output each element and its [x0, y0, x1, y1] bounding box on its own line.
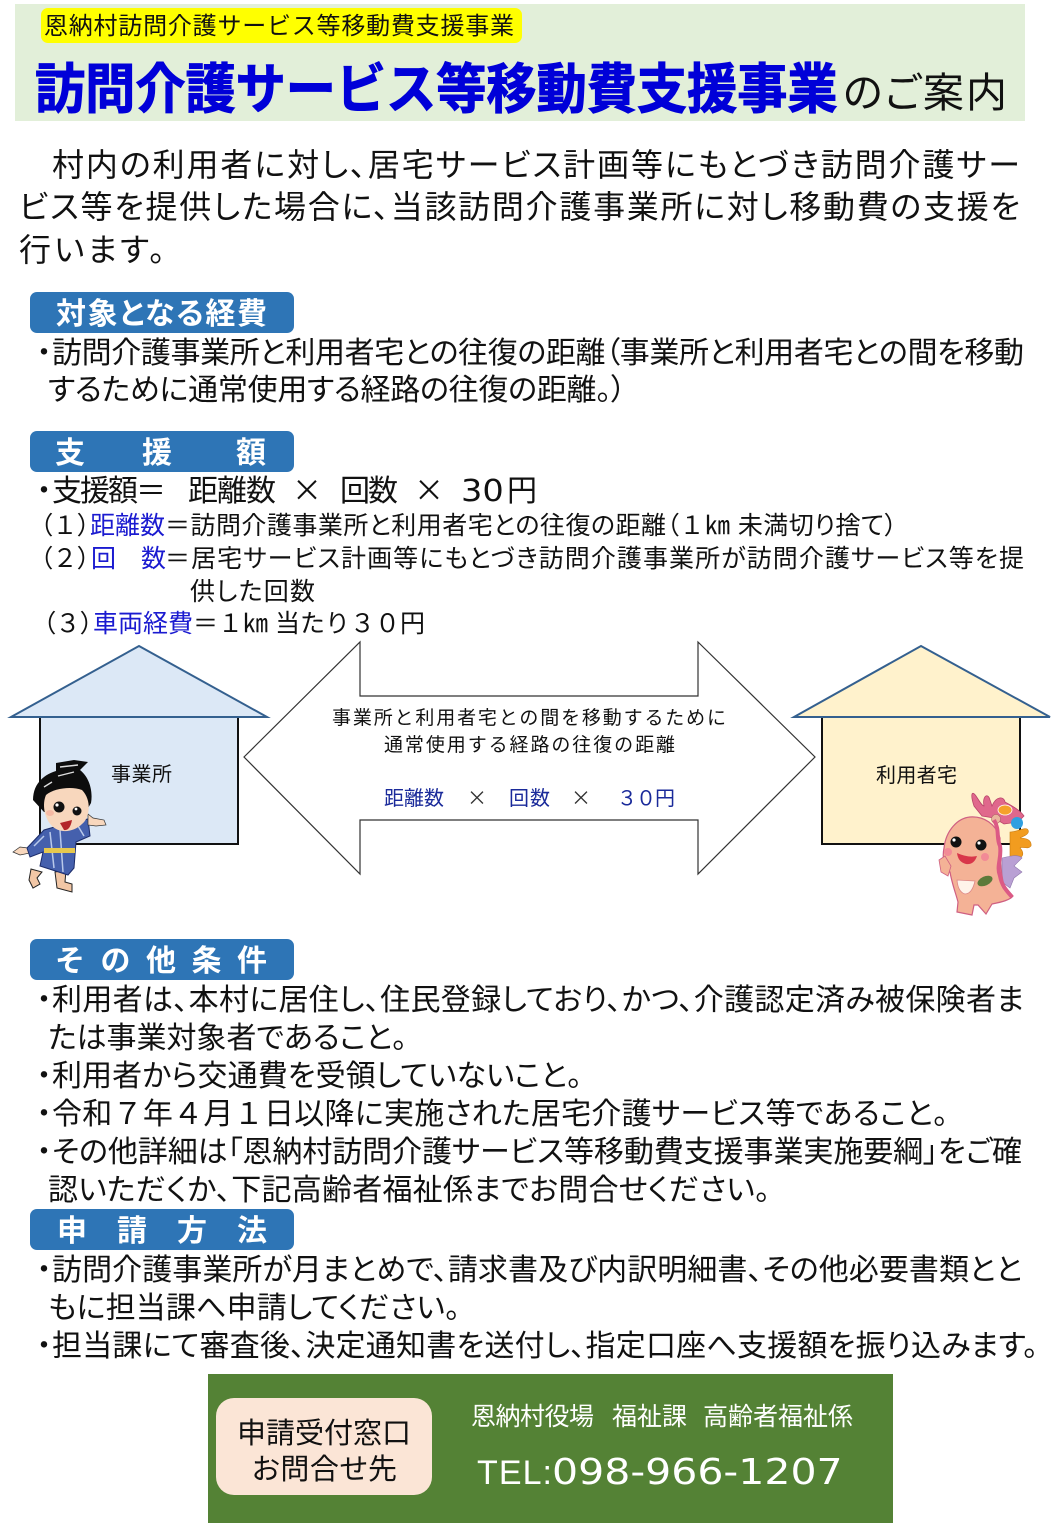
department name: 高齢者福祉係	[703, 1403, 853, 1431]
text: application method	[29, 1254, 1038, 1363]
text: application method: もに担当課へ申請してください。	[48, 1292, 460, 1325]
phone number: 098-966-1207	[552, 1451, 843, 1493]
text: eligible costs: 訪問介護事業所と利用者宅との往復の距離（事業所と利用者宅との間を移動	[52, 337, 1024, 370]
diagram: double arrow: ３０円	[617, 788, 675, 810]
contact label: お問合せ先	[252, 1453, 397, 1486]
panel: contact	[208, 1374, 893, 1523]
text: support amount: （１）	[40, 512, 90, 540]
department name	[471, 1403, 853, 1431]
heading: support amount: 支	[55, 437, 85, 470]
heading: application method: 方	[177, 1215, 207, 1248]
heading: eligible costs	[30, 292, 294, 333]
heading: support amount: 援	[142, 437, 172, 470]
intro text: 村内の利用者に対し、居宅サービス計画等にもとづき訪問介護サー	[52, 147, 1020, 183]
heading: support amount: 額	[236, 437, 266, 470]
text: eligible costs: ・	[29, 337, 59, 370]
text: application method: ・	[29, 1330, 59, 1363]
text: eligible costs: するために通常使用する経路の往復の距離。）	[48, 374, 626, 407]
title suffix: のご案内	[843, 70, 1007, 116]
text: support amount: ×	[414, 466, 444, 510]
department name: 福祉課	[612, 1403, 687, 1431]
diagram: home house: 利用者宅	[876, 764, 957, 787]
text: support amount: 支援額＝	[52, 475, 166, 508]
text: other conditions: 認いただくか、下記高齢者福祉係までお問合せください。	[48, 1174, 770, 1207]
diagram: home house	[794, 646, 1050, 844]
diagram: double arrow: 通常使用する経路の往復の距離	[384, 734, 675, 756]
heading: other conditions: その他条件	[55, 945, 267, 978]
diagram: double arrow: 事業所と利用者宅との間を移動するために	[332, 707, 726, 729]
diagram: double arrow: 回数	[509, 787, 550, 810]
icon: coral mascot	[939, 793, 1031, 915]
text: support amount: ・	[29, 475, 59, 508]
diagram: double arrow: ×	[467, 782, 487, 811]
text: support amount: ×	[292, 466, 322, 510]
text: support amount: ＝訪問介護事業所と利用者宅との往復の距離（１㎞ 未満切り捨て）	[165, 512, 897, 540]
contact label: 申請受付窓口	[237, 1417, 411, 1450]
text: other conditions: ・	[29, 1060, 59, 1093]
text: other conditions: たは事業対象者であること。	[48, 1022, 407, 1055]
text: application method: ・	[29, 1254, 59, 1287]
intro text: ビス等を提供した場合に、当該訪問介護事業所に対し移動費の支援を	[19, 189, 1020, 225]
text: support amount: ＝居宅サービス計画等にもとづき訪問介護事業所が訪問介護サービス等を提	[165, 545, 1024, 573]
contact label	[216, 1398, 432, 1495]
heading: application method	[30, 1209, 294, 1250]
text: other conditions	[29, 984, 1024, 1207]
text: other conditions: その他詳細は「恩納村訪問介護サービス等移動費支援事業実施要綱」をご確	[52, 1136, 1022, 1169]
text: support amount: 数	[141, 545, 166, 573]
intro text: 行います。	[19, 232, 165, 268]
text: other conditions: ・	[29, 984, 59, 1017]
text: support amount: （３）	[43, 610, 93, 638]
text: support amount: 円	[507, 475, 537, 508]
text: support amount: 距離数	[188, 475, 276, 508]
text: support amount: 30	[461, 473, 504, 509]
intro text	[19, 147, 1020, 268]
subtitle on yellow highlight: 恩納村訪問介護サービス等移動費支援事業	[44, 13, 514, 40]
diagram: office house: 事業所	[111, 763, 172, 786]
heading: application method: 申	[57, 1215, 87, 1248]
text: support amount: 回	[91, 545, 116, 573]
text: eligible costs	[29, 337, 1024, 407]
heading: eligible costs: 対象となる経費	[56, 298, 267, 331]
text: application method: 担当課にて審査後、決定通知書を送付し、指定口座へ支援額を振り込みます。	[52, 1330, 1038, 1363]
heading: application method: 請	[117, 1215, 147, 1248]
main title: 訪問介護サービス等移動費支援事業	[35, 60, 838, 120]
text: support amount: 距離数	[90, 512, 165, 540]
diagram: office house	[11, 646, 267, 844]
text: support amount: （２）	[40, 545, 90, 573]
text: support amount	[29, 466, 1024, 638]
diagram: double arrow	[244, 642, 815, 874]
text: other conditions: 利用者は、本村に居住し、住民登録しており、かつ、介護認定済み被保険者ま	[52, 984, 1024, 1017]
phone number: TEL:	[477, 1454, 552, 1492]
text: support amount: 供した回数	[190, 578, 315, 606]
text: support amount: 回数	[340, 475, 398, 508]
heading: other conditions	[30, 939, 294, 980]
text: support amount: ＝１㎞ 当たり３０円	[193, 610, 425, 638]
text: other conditions: 利用者から交通費を受領していないこと。	[52, 1060, 582, 1093]
text: application method: 訪問介護事業所が月まとめで、請求書及び内訳明細書、その他必要書類とと	[52, 1254, 1022, 1287]
heading: support amount	[30, 431, 294, 472]
text: other conditions: ・	[29, 1098, 59, 1131]
text: other conditions: ・	[29, 1136, 59, 1169]
text: other conditions: 令和７年４月１日以降に実施された居宅介護サービス等であること。	[52, 1098, 948, 1131]
text: support amount: 車両経費	[93, 610, 193, 638]
diagram: double arrow: 距離数	[384, 787, 444, 810]
heading: application method: 法	[237, 1215, 267, 1248]
panel: title banner	[15, 4, 1025, 121]
department name: 恩納村役場	[471, 1403, 594, 1431]
diagram: double arrow: ×	[571, 782, 591, 811]
icon: mascot in blue kimono	[13, 760, 106, 892]
